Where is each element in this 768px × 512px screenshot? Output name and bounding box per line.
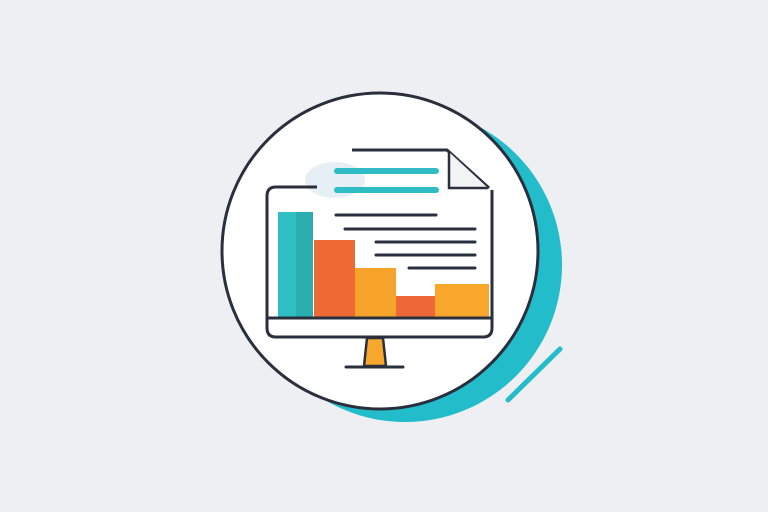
- teal heading lines: [337, 168, 436, 174]
- text lines: [336, 215, 475, 268]
- bar chart: [278, 212, 313, 317]
- light blob: [305, 162, 365, 198]
- stand: [364, 338, 386, 366]
- baseline: [268, 316, 491, 320]
- monitor with document and chart: [267, 150, 492, 367]
- teal slash accent: [508, 349, 560, 400]
- teal crescent shadow: [248, 108, 562, 422]
- monitor frame: [267, 187, 492, 337]
- main circle: [222, 93, 538, 409]
- document outline: [352, 150, 489, 188]
